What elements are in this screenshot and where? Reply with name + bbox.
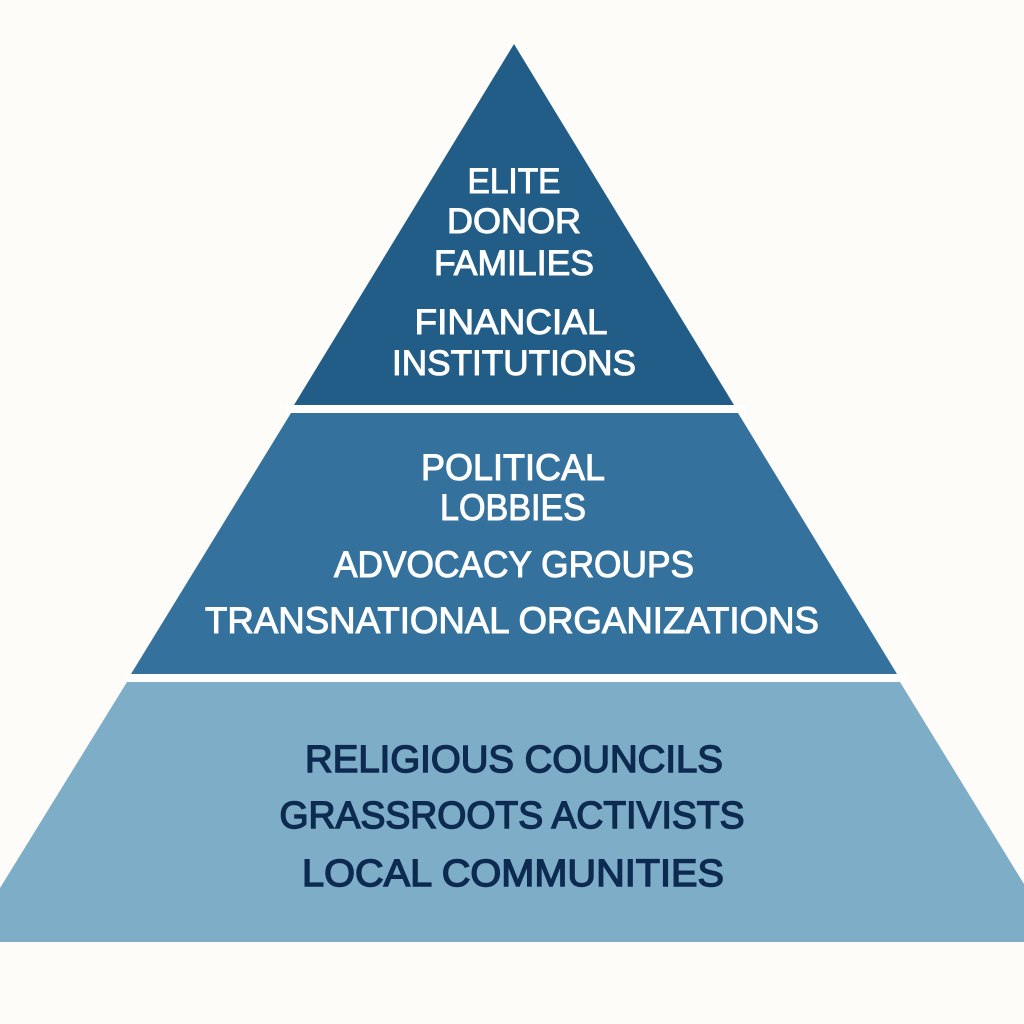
label: political lobbies: POLITICAL [421,447,605,488]
label: political lobbies: LOBBIES [440,487,586,528]
tier 2: middle of pyramid [131,413,897,674]
tier 3: base of pyramid [0,682,1024,942]
label: financial institutions: INSTITUTIONS [392,344,636,383]
label: local communities: LOCAL COMMUNITIES [302,853,724,895]
label: elite donor families: DONOR [447,202,581,241]
label: elite donor families: ELITE [468,162,560,201]
label: advocacy groups: ADVOCACY GROUPS [334,544,694,585]
label: religious councils: RELIGIOUS COUNCILS [305,739,723,781]
label: elite donor families: FAMILIES [434,244,594,283]
label: transnational organizations: TRANSNATIONAL ORGANIZATIONS [205,600,819,641]
label: grassroots activists: GRASSROOTS ACTIVISTS [280,795,744,837]
label: financial institutions [392,303,636,383]
label: elite donor families [434,162,594,283]
tier 1: top of pyramid [294,44,734,405]
label: political lobbies [421,447,605,528]
label: financial institutions: FINANCIAL [414,303,608,342]
